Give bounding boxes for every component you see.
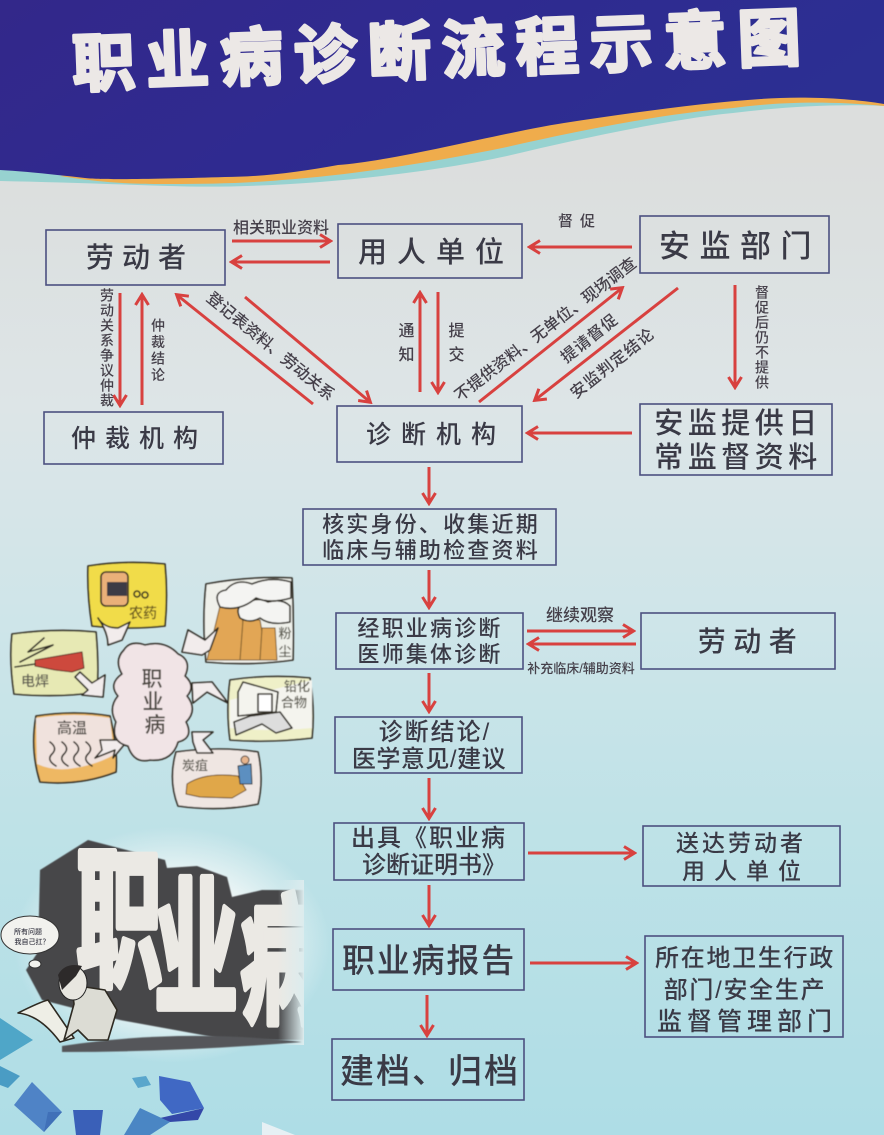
panel: 职业病 cloud [112, 643, 192, 761]
panel: 粉尘 [182, 578, 293, 664]
box: 诊断结论: 医学意见/建议 [352, 746, 506, 773]
panel: 高温 [34, 713, 128, 783]
arrow: step 6 [426, 995, 428, 1035]
arrow: 通知 [396, 293, 420, 392]
panel: 电焊: 电焊 [21, 673, 49, 689]
arrow: 继续观察 [527, 606, 633, 631]
arrow: to 送达 [528, 852, 634, 854]
flowchart: main diagnosis sequence [303, 467, 843, 1100]
right fade [278, 880, 304, 1045]
box: 仲裁机构 [44, 412, 223, 464]
arrow: step 2 [428, 570, 430, 607]
arrow: 相关职业资料: 相关职业资料 [233, 219, 329, 237]
arrow: step 4 [428, 778, 430, 818]
block letters: 病 [240, 885, 324, 1042]
box: 集体诊断: 医师集体诊断 [357, 642, 503, 667]
box: 建档、归档: 建档、归档 [340, 1053, 520, 1091]
box: 卫生行政部门 [645, 936, 843, 1037]
arrow: 督促后仍不提供 [735, 285, 770, 390]
panel: 农药 [88, 562, 166, 645]
arrow: step 3 [428, 673, 430, 711]
panel: 炭疽 [172, 732, 261, 809]
dark block backing [26, 840, 304, 1040]
speech bubble [1, 916, 59, 968]
illustration: occupational disease causes [11, 562, 313, 809]
panel: 粉尘: 尘 [278, 644, 292, 659]
panel: 炭疽: 炭疽 [182, 758, 208, 773]
label: 登记表资料、劳动关系: 登记表资料、劳动关系 [203, 289, 338, 404]
illustration: 职业病 block letters with figure [1, 839, 324, 1052]
box: 劳动者 [46, 230, 225, 285]
panel: 粉尘: 粉 [278, 626, 292, 641]
arrow: 诊断机构 to 劳动者 [177, 295, 313, 404]
figure carrying block [18, 965, 117, 1042]
box: 用人单位: 用人单位 [358, 236, 514, 269]
box: 劳动者: 劳动者 [86, 242, 194, 273]
speech bubble: 所有问题 [14, 927, 42, 936]
panel: 铅化合物: 铅化 [284, 679, 310, 694]
box: 集体诊断 [336, 613, 523, 669]
arrow: 安监提供 to 诊断机构 [528, 432, 632, 434]
halo behind block letters [14, 827, 330, 1063]
box: 诊断机构: 诊断机构 [366, 421, 506, 449]
box: 安监提供日常监督资料 [640, 404, 832, 475]
arrow: 诊断机构 to 安监部门 [479, 288, 622, 402]
box: 核实身份: 核实身份、收集近期 [322, 512, 540, 537]
box: 送达劳动者用人单位: 送达劳动者 [676, 830, 806, 856]
arrow: 安监部门 to 诊断机构 [535, 288, 678, 400]
arrow: 继续观察: 继续观察 [546, 606, 614, 625]
arrow: to 卫生行政 [530, 962, 636, 964]
box: 安监部门: 安监部门 [659, 229, 821, 264]
arrow: 补充临床/辅助资料: 补充临床/辅助资料 [527, 661, 635, 676]
ground shading [62, 1036, 302, 1052]
label: 不提供资料、无单位、现场调查: 不提供资料、无单位、现场调查 [451, 253, 640, 405]
box: 诊断结论: 诊断结论/ [379, 719, 491, 746]
panel: 铅化合物: 合物 [281, 695, 307, 710]
decoration: blue cubes [0, 1018, 295, 1135]
arrow: 劳动关系争议仲裁: 劳动关系争议仲裁 [99, 287, 115, 408]
label: 提请督促: 提请督促 [557, 310, 622, 367]
box: 集体诊断: 经职业病诊断 [357, 616, 503, 641]
arrow: 提交 [438, 292, 464, 392]
arrow: 用人单位 to 劳动者 [232, 260, 330, 264]
box: 职业病报告 [333, 929, 524, 990]
box: 安监部门 [640, 216, 829, 273]
arrow: 督促后仍不提供: 督促后仍不提供 [754, 285, 770, 390]
arrow: 补充临床/辅助资料 [527, 644, 636, 676]
panel: 职业病 cloud: 职 [142, 668, 162, 691]
box: 用人单位 [338, 224, 522, 278]
arrow: 督促: 督促 [558, 213, 602, 230]
panel: 高温: 高温 [57, 720, 87, 737]
box: 出具证明书 [334, 823, 524, 880]
speech bubble: 我自己扛？ [14, 937, 50, 946]
flowchart: upper network [44, 213, 832, 475]
panel: 职业病 cloud: 业 [142, 691, 164, 714]
panel: 农药: 农药 [129, 605, 157, 621]
panel: 职业病 cloud: 病 [144, 714, 166, 737]
box: 卫生行政部门: 监督管理部门 [657, 1008, 837, 1036]
arrow: step 5 [428, 885, 430, 925]
panel: 铅化合物 [192, 676, 313, 741]
title: 职业病诊断流程示意图 [71, 3, 813, 100]
box: 出具证明书: 出具《职业病 [351, 825, 507, 852]
block letters: 职 [76, 839, 162, 1007]
block letters [76, 848, 302, 1028]
panel: 电焊 [11, 630, 105, 697]
box: 安监提供日常监督资料: 安监提供日 [654, 407, 822, 440]
arrow: 督促 [530, 213, 632, 247]
box: 劳动者 right: 劳动者 [698, 626, 804, 657]
box: 建档、归档 [332, 1039, 524, 1100]
arrow: 仲裁结论: 仲裁结论 [150, 318, 166, 384]
box: 核实身份: 临床与辅助检查资料 [322, 538, 540, 563]
box: 职业病报告: 职业病报告 [342, 942, 516, 979]
box: 核实身份 [303, 509, 556, 565]
box: 诊断机构 [337, 406, 522, 462]
box: 送达劳动者用人单位 [643, 826, 840, 886]
block letters: 业 [154, 867, 238, 1034]
box: 出具证明书: 诊断证明书》 [362, 852, 506, 879]
box: 劳动者 right [641, 613, 835, 669]
arrow: 通知: 通知 [396, 322, 414, 370]
arrow: 劳动者 to 诊断机构 [245, 297, 370, 402]
header banner with wave [0, 0, 884, 187]
box: 卫生行政部门: 所在地卫生行政 [655, 945, 835, 972]
arrow: step 1 [428, 467, 430, 503]
arrow: 仲裁结论 [142, 295, 166, 405]
box: 仲裁机构: 仲裁机构 [71, 425, 207, 453]
box: 安监提供日常监督资料: 常监督资料 [654, 441, 822, 474]
box: 送达劳动者用人单位: 用人单位 [682, 858, 810, 884]
arrow: 提交: 提交 [446, 322, 464, 370]
box: 诊断结论 [335, 717, 522, 773]
label: 安监判定结论: 安监判定结论 [567, 324, 658, 402]
box: 卫生行政部门: 部门/安全生产 [664, 977, 826, 1004]
